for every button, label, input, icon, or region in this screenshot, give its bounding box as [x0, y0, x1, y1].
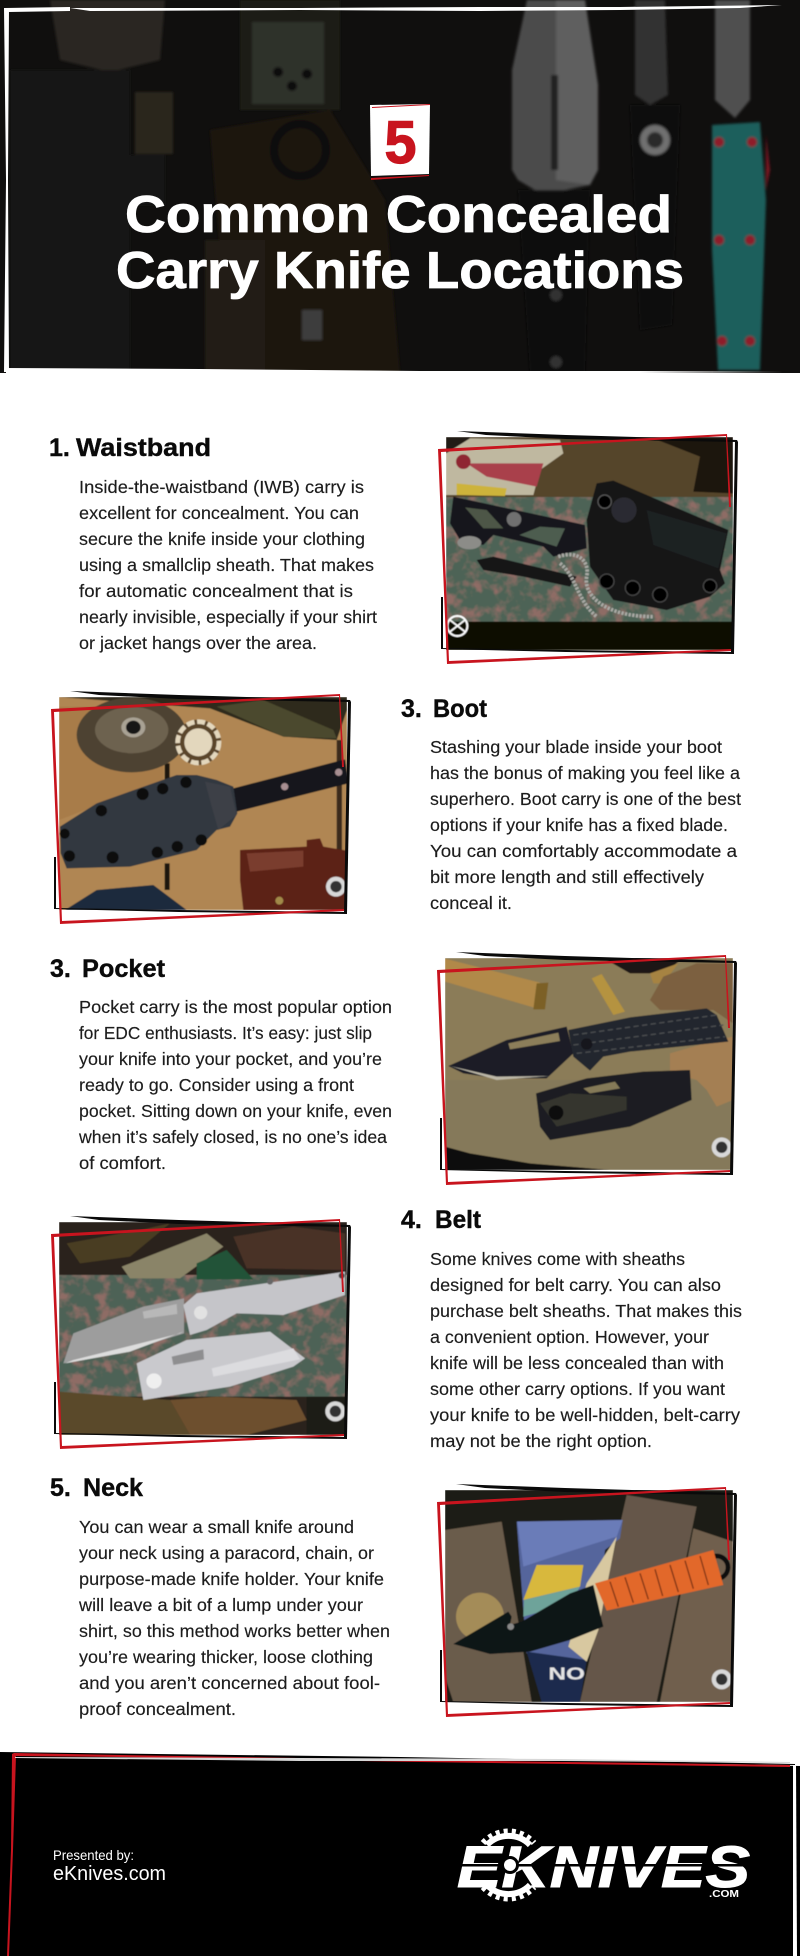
text: pocket body: ready to go. Consider using a front	[79, 1075, 354, 1095]
footer panel	[0, 1740, 800, 1956]
number badge: 5	[384, 109, 416, 176]
title: Carry Knife Locations	[116, 242, 684, 300]
text: belt body: designed for belt carry. You can also	[430, 1275, 721, 1295]
text: belt body: a convenient option. However, your	[430, 1327, 709, 1347]
text: boot body: has the bonus of making you feel like a	[430, 763, 740, 783]
photo frame	[51, 1216, 351, 1449]
text: pocket body: Pocket carry is the most popular option	[79, 997, 392, 1017]
text: pocket body: your knife into your pocket, and you’re	[79, 1049, 382, 1069]
text: pocket body: for EDC enthusiasts. It’s easy: just slip	[79, 1023, 372, 1043]
text: neck body: You can wear a small knife around	[79, 1517, 354, 1537]
text: waistband body: or jacket hangs over the area.	[79, 633, 317, 653]
text: waistband body: using a smallclip sheath. That makes	[79, 555, 374, 575]
presented by text	[53, 1847, 166, 1885]
text: neck body: shirt, so this method works better when	[79, 1621, 390, 1641]
heading: pocket: 3.	[50, 955, 71, 983]
text: boot body: You can comfortably accommodate a	[430, 841, 737, 861]
text: belt body: Some knives come with sheaths	[430, 1249, 685, 1269]
heading: boot: 3.	[401, 695, 422, 723]
header torn white frame	[4, 5, 784, 373]
text: waistband body: for automatic concealment that is	[79, 581, 353, 601]
text: neck body: will leave a bit of a lump under your	[78, 1595, 363, 1615]
section 4: belt	[51, 1206, 742, 1451]
title: Common Concealed	[125, 186, 672, 244]
text: belt body: knife will be less concealed than with	[430, 1353, 724, 1373]
logo gear	[483, 1831, 534, 1899]
photo frame	[51, 691, 351, 924]
section 2: boot	[51, 691, 741, 924]
photo: silver folding knives on rusty tin	[51, 1216, 351, 1449]
number badge	[370, 104, 430, 180]
photo: orange paracord knife on planks	[437, 1484, 737, 1717]
text: waistband body	[79, 477, 377, 653]
text: neck body: your neck using a paracord, chain, or	[79, 1543, 374, 1563]
title	[116, 186, 684, 300]
heading: neck: 5.	[50, 1474, 71, 1502]
header photo background	[10, 0, 770, 373]
photo frame	[437, 1484, 737, 1717]
text: neck body	[78, 1517, 390, 1719]
heading: belt: Belt	[435, 1206, 482, 1234]
text: boot body: Stashing your blade inside your boot	[430, 737, 722, 757]
heading: neck	[50, 1474, 143, 1502]
text: pocket body: of comfort.	[79, 1153, 166, 1173]
section 1: waistband	[49, 431, 738, 664]
text: waistband body: nearly invisible, especially if your shirt	[79, 607, 377, 627]
text: belt body: some other carry options. If you want	[430, 1379, 725, 1399]
photo frame	[438, 431, 738, 664]
text: pocket body: pocket. Sitting down on your knife, even	[79, 1101, 392, 1121]
photo: folding knives on canvas	[437, 952, 737, 1185]
text: boot body	[430, 737, 741, 913]
photo frame	[437, 952, 737, 1185]
heading: boot	[401, 695, 488, 723]
text: boot body: bit more length and still effectively	[430, 867, 704, 887]
text: neck body: and you aren’t concerned about fool-	[79, 1673, 380, 1693]
photo: sheathed knife on wood	[51, 691, 351, 924]
text: boot body: options if your knife has a fixed blade.	[430, 815, 728, 835]
text: belt body: purchase belt sheaths. That makes this	[430, 1301, 742, 1321]
text: belt body: your knife to be well-hidden, belt-carry	[430, 1405, 740, 1425]
heading: waistband: 1.	[49, 434, 70, 462]
eKnives logo: EKNIVES	[457, 1835, 750, 1900]
text: neck body: purpose-made knife holder. Your knife	[79, 1569, 384, 1589]
eKnives logo: .COM	[709, 1888, 739, 1900]
text: waistband body: excellent for concealment. You can	[79, 503, 359, 523]
presented by text: eKnives.com	[53, 1862, 166, 1885]
photo: orange paracord knife on planks: NO	[548, 1663, 585, 1683]
section 3: pocket	[50, 952, 737, 1185]
text: pocket body	[78, 997, 392, 1173]
photo: neck knife and sheath on rusty tin	[438, 431, 738, 664]
heading: neck: Neck	[83, 1474, 143, 1502]
heading: boot: Boot	[433, 695, 488, 723]
text: boot body: superhero. Boot carry is one of the best	[430, 789, 741, 809]
heading: pocket: Pocket	[82, 955, 166, 983]
header banner	[0, 0, 800, 376]
heading: belt: 4.	[401, 1206, 422, 1234]
heading: belt	[401, 1206, 482, 1234]
text: belt body: may not be the right option.	[430, 1431, 652, 1451]
heading: waistband: Waistband	[76, 434, 211, 462]
text: waistband body: secure the knife inside your clothing	[79, 529, 365, 549]
section 5: neck	[50, 1474, 737, 1719]
text: boot body: conceal it.	[430, 893, 512, 913]
text: waistband body: Inside-the-waistband (IWB) carry is	[79, 477, 364, 497]
text: neck body: you’re wearing thicker, loose clothing	[79, 1647, 373, 1667]
text: neck body: proof concealment.	[79, 1699, 236, 1719]
text: pocket body: when it’s safely closed, is no one’s idea	[78, 1127, 387, 1147]
text: belt body	[430, 1249, 742, 1451]
presented by text: Presented by:	[53, 1847, 134, 1863]
